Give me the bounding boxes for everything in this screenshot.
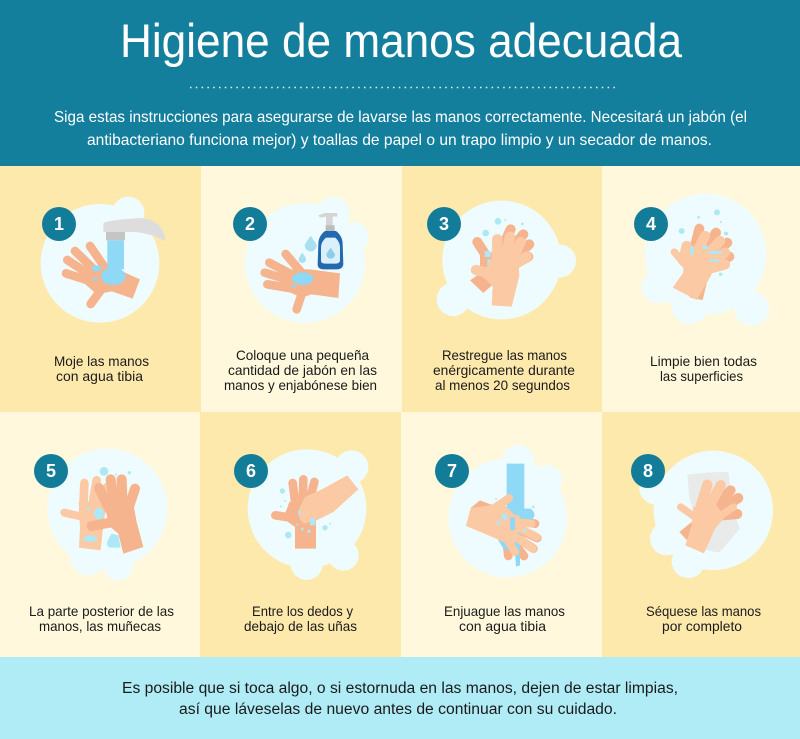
step 1 caption: Moje las manos [54, 353, 149, 369]
upper hand [298, 475, 358, 524]
towel [687, 472, 740, 553]
step 8 caption: por completo [662, 618, 742, 634]
step 1 illustration: hand under faucet [41, 197, 166, 323]
step 5 number badge: 5 [46, 461, 56, 481]
step 8 caption [646, 603, 761, 634]
front hand [466, 498, 537, 552]
front hand [673, 236, 725, 300]
intro text: Siga estas instrucciones para asegurarse de lavarse las manos correctamente. Necesitará un jabón (el [54, 109, 747, 126]
intro text: antibacteriano funciona mejor) y toallas de papel o un trapo limpio y un secador de manos. [87, 132, 712, 149]
step 1 number badge: 1 [54, 214, 64, 234]
step 4 caption: Limpie bien todas [650, 353, 757, 369]
step 5 caption: La parte posterior de las [29, 603, 174, 619]
step 4 caption: las superficies [660, 368, 743, 384]
step 2 caption: manos y enjabónese bien [224, 377, 377, 393]
step 5 caption [29, 603, 174, 634]
step 8 caption: Séquese las manos [646, 603, 761, 619]
footer note: así que láveselas de nuevo antes de continuar con su cuidado. [179, 701, 617, 718]
step 4 number badge [634, 207, 668, 241]
step 7 number badge [435, 454, 469, 488]
step 2 caption: cantidad de jabón en las [228, 362, 377, 378]
step 1 caption: con agua tibia [56, 368, 143, 384]
front hand [92, 479, 143, 554]
front hand [476, 237, 527, 307]
step 7 number badge: 7 [447, 461, 457, 481]
step 6 number badge: 6 [246, 461, 256, 481]
step 3 caption: Restregue las manos [442, 347, 567, 363]
rear hand [64, 480, 107, 550]
step 3 number badge [427, 207, 461, 241]
footer note: Es posible que si toca algo, o si estornuda en las manos, dejen de estar limpias, [122, 680, 678, 697]
step 2 illustration: soap dispenser and hand [245, 197, 368, 323]
back hand fingers [507, 520, 537, 556]
step 7 caption: Enjuague las manos [444, 603, 565, 619]
step 4 number badge: 4 [646, 214, 656, 234]
step 6 illustration: between fingers [248, 449, 368, 580]
back hand [683, 229, 729, 300]
step 4 illustration: interlaced hands [642, 194, 769, 326]
footer note [122, 680, 678, 718]
lower hand [275, 479, 316, 549]
step 1 number badge [42, 207, 76, 241]
front hand [681, 485, 733, 553]
step 6 caption: Entre los dedos y [252, 603, 353, 619]
faucet [103, 218, 166, 241]
step 4 caption [650, 353, 757, 384]
hand [66, 246, 140, 304]
footer band [0, 657, 800, 739]
title: Higiene de manos adecuada [120, 14, 683, 67]
back hand [470, 229, 529, 293]
step 5 illustration: back of hands and wrists [47, 449, 167, 580]
step 3 number badge: 3 [439, 214, 449, 234]
step 2 number badge: 2 [245, 214, 255, 234]
step 2 number badge [233, 207, 267, 241]
step 2 caption: Coloque una pequeña [236, 347, 369, 363]
step 3 caption: enérgicamente durante [433, 362, 575, 378]
step 1 caption [54, 353, 149, 384]
step 5 caption: manos, las muñecas [39, 618, 161, 634]
step 7 illustration: rinsing under water [448, 445, 567, 577]
step 8 number badge [631, 454, 665, 488]
hand [265, 254, 340, 309]
step 6 caption: debajo de las uñas [244, 618, 357, 634]
water stream [498, 464, 534, 567]
step 2 caption [224, 347, 377, 393]
intro text [54, 109, 747, 149]
header band [0, 0, 800, 166]
step 3 caption [433, 347, 575, 393]
step 3 caption: al menos 20 segundos [435, 377, 570, 393]
step 7 caption [444, 603, 565, 634]
step 7 caption: con agua tibia [459, 618, 546, 634]
step 6 caption [244, 603, 357, 634]
step 5 number badge [34, 454, 68, 488]
step 6 number badge [234, 454, 268, 488]
step 8 illustration: drying with towel [639, 451, 773, 578]
step 3 illustration: rubbing palms [437, 201, 576, 319]
panel backgrounds [0, 166, 800, 658]
step 8 number badge: 8 [643, 461, 653, 481]
back hand [679, 490, 738, 544]
soap bottle [318, 213, 343, 269]
